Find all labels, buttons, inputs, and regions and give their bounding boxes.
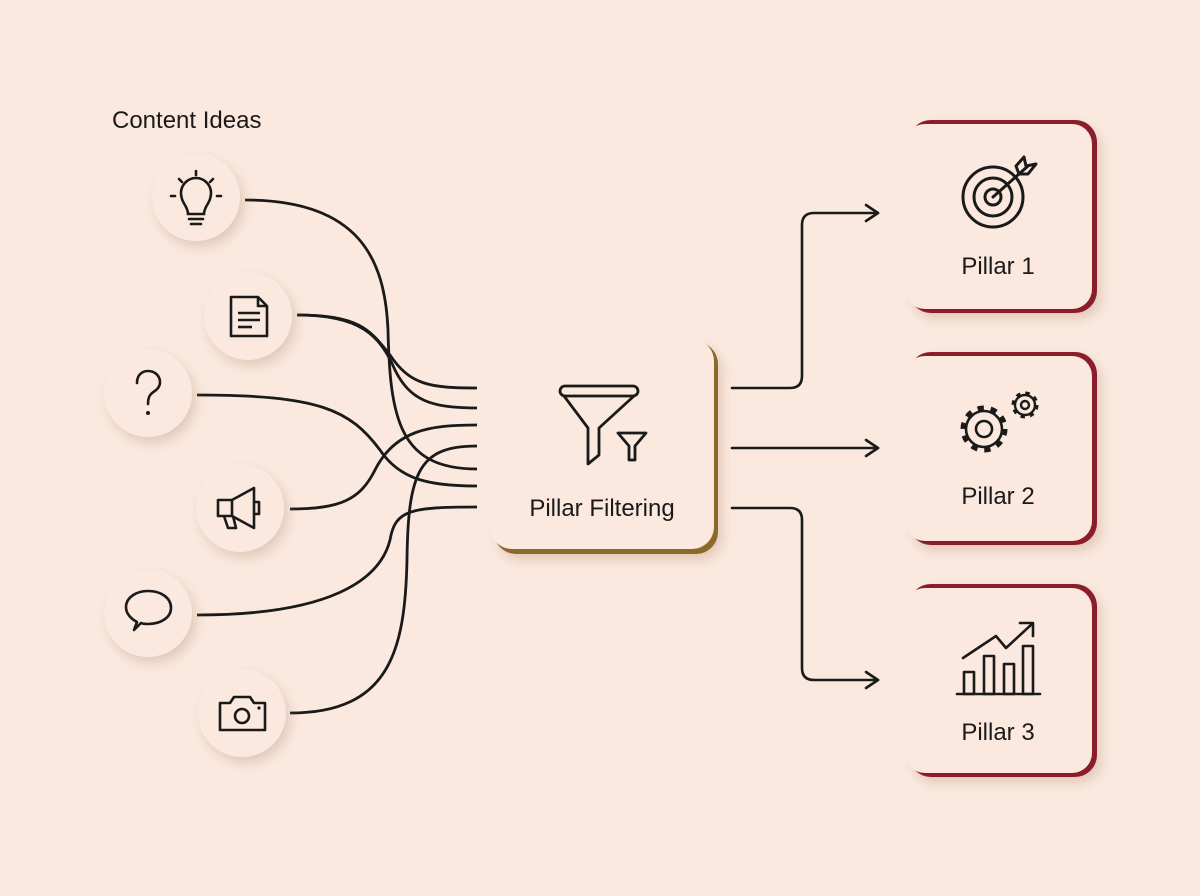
icon: document (204, 272, 292, 360)
icon: megaphone (196, 464, 284, 552)
icon: speech bubble (104, 569, 192, 657)
connector lines (197, 200, 477, 713)
icon: target (963, 157, 1036, 227)
panel: pillar 2: Pillar 2 (961, 483, 1035, 510)
icon: gears (964, 394, 1036, 449)
icon: bar chart (957, 623, 1040, 694)
panel: pillar 3: Pillar 3 (961, 719, 1035, 746)
title: Content Ideas (112, 107, 261, 134)
output arrows (732, 205, 878, 688)
icon: funnel (560, 386, 646, 464)
panel: pillar filtering (490, 339, 718, 554)
panel: pillar 3 (905, 584, 1097, 777)
label: pillar filtering: Pillar Filtering (529, 495, 675, 522)
panel: pillar 1: Pillar 1 (961, 253, 1035, 280)
panel: pillar 1 (905, 120, 1097, 313)
panel: pillar 2 (905, 352, 1097, 545)
icon: lightbulb (152, 153, 240, 241)
icon: question (104, 349, 192, 437)
icon: camera (198, 669, 286, 757)
